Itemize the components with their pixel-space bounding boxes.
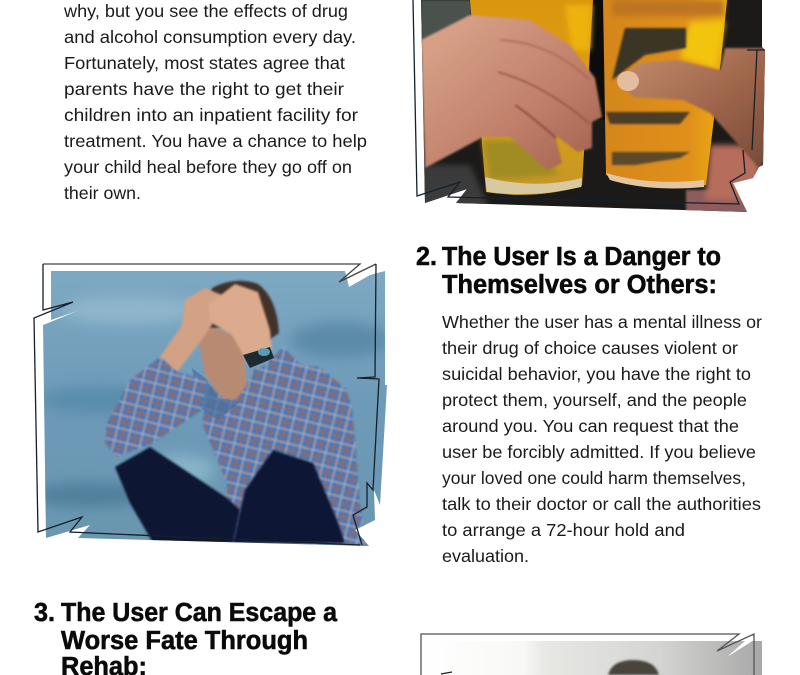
heading: section 3: 3. [34,599,55,627]
text block: section 2 body: your loved one could harm themselves, [442,468,746,488]
left sleeve [105,357,207,457]
heading: section 3: Worse Fate Through [61,627,308,655]
text block: intro paragraph: why, but you see the effects of drug [63,1,348,21]
heading: section 3 [34,599,338,675]
text block: intro paragraph: parents have the right to get their [64,79,344,99]
heading: section 2: The User Is a Danger to [442,243,721,271]
photo: distressed man holding his head [30,264,390,550]
text block: section 2 body: evaluation. [442,546,529,566]
left forearm and hand [160,288,222,372]
heading: section 2: 2. [416,243,437,271]
heading: section 3: The User Can Escape a [61,599,338,627]
heading: section 2 [416,243,721,299]
hair [208,279,280,340]
photo: third photo, top of a person's head [421,634,762,675]
text block: section 2 body: talk to their doctor or call the authorities [442,494,761,514]
face [197,328,247,400]
watch [243,347,274,368]
text block: intro paragraph: Fortunately, most states agree that [64,53,345,73]
text block: section 2 body: Whether the user has a mental illness or [442,312,762,332]
left hand with fingers [421,15,602,170]
text block: intro paragraph [63,1,367,203]
torso shirt [202,347,367,547]
right hand [617,48,768,167]
text block: section 2 body: suicidal behavior, you have the right to [442,364,751,384]
text block: section 2 body [442,312,762,566]
text block: section 2 body: to arrange a 72-hour hold and [442,520,685,540]
text block: intro paragraph: treatment. You have a chance to help [64,131,367,151]
heading: section 2: Themselves or Others: [442,271,717,299]
text block: intro paragraph: children into an inpatient facility for [64,105,358,125]
trousers [115,447,240,543]
text block: section 2 body: around you. You can request that the [442,416,739,436]
text block: intro paragraph: and alcohol consumption every day. [64,27,356,47]
text block: section 2 body: user be forcibly admitted. If you believe [442,442,756,462]
photo: two hands holding beer glasses [410,0,770,215]
text block: intro paragraph: your child heal before they go off on [64,157,352,177]
right hand [208,284,272,358]
right sleeve [250,363,353,453]
text block: section 2 body: protect them, yourself, and the people [442,390,747,410]
text block: intro paragraph: their own. [64,183,141,203]
text block: section 2 body: their drug of choice causes violent or [442,338,738,358]
